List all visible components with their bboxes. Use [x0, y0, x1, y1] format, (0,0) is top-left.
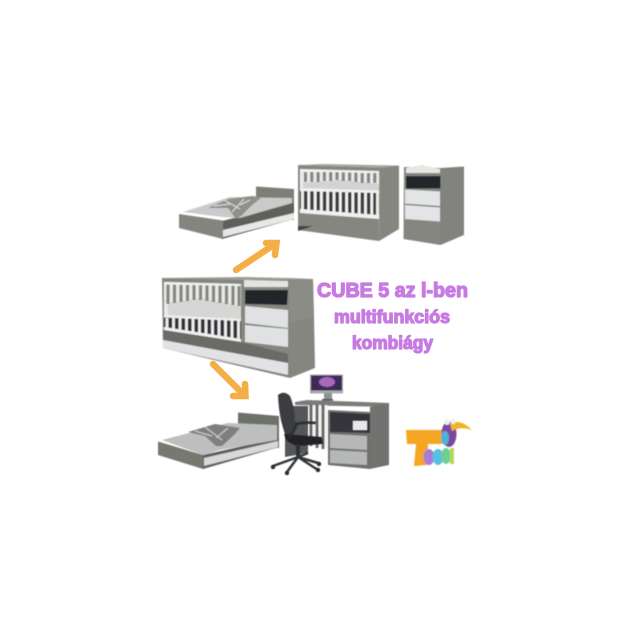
heading: product name: kombiágy	[352, 333, 433, 353]
logo: Toodi toucan	[406, 419, 472, 466]
desk with drawers	[285, 400, 389, 469]
bottom single bed	[158, 412, 279, 469]
middle combi cot	[162, 277, 315, 378]
heading: product name	[317, 280, 468, 353]
icon: computer monitor	[310, 374, 343, 401]
top crib	[298, 164, 399, 241]
top single bed	[179, 186, 294, 239]
arrow: down to bed and desk set	[213, 364, 246, 396]
heading: product name: CUBE 5 az l-ben	[317, 280, 468, 302]
heading: product name: multifunkciós	[334, 307, 450, 327]
top chest of drawers	[404, 165, 464, 245]
arrow: up to cot and bed set	[236, 243, 276, 270]
office chair	[271, 393, 323, 475]
